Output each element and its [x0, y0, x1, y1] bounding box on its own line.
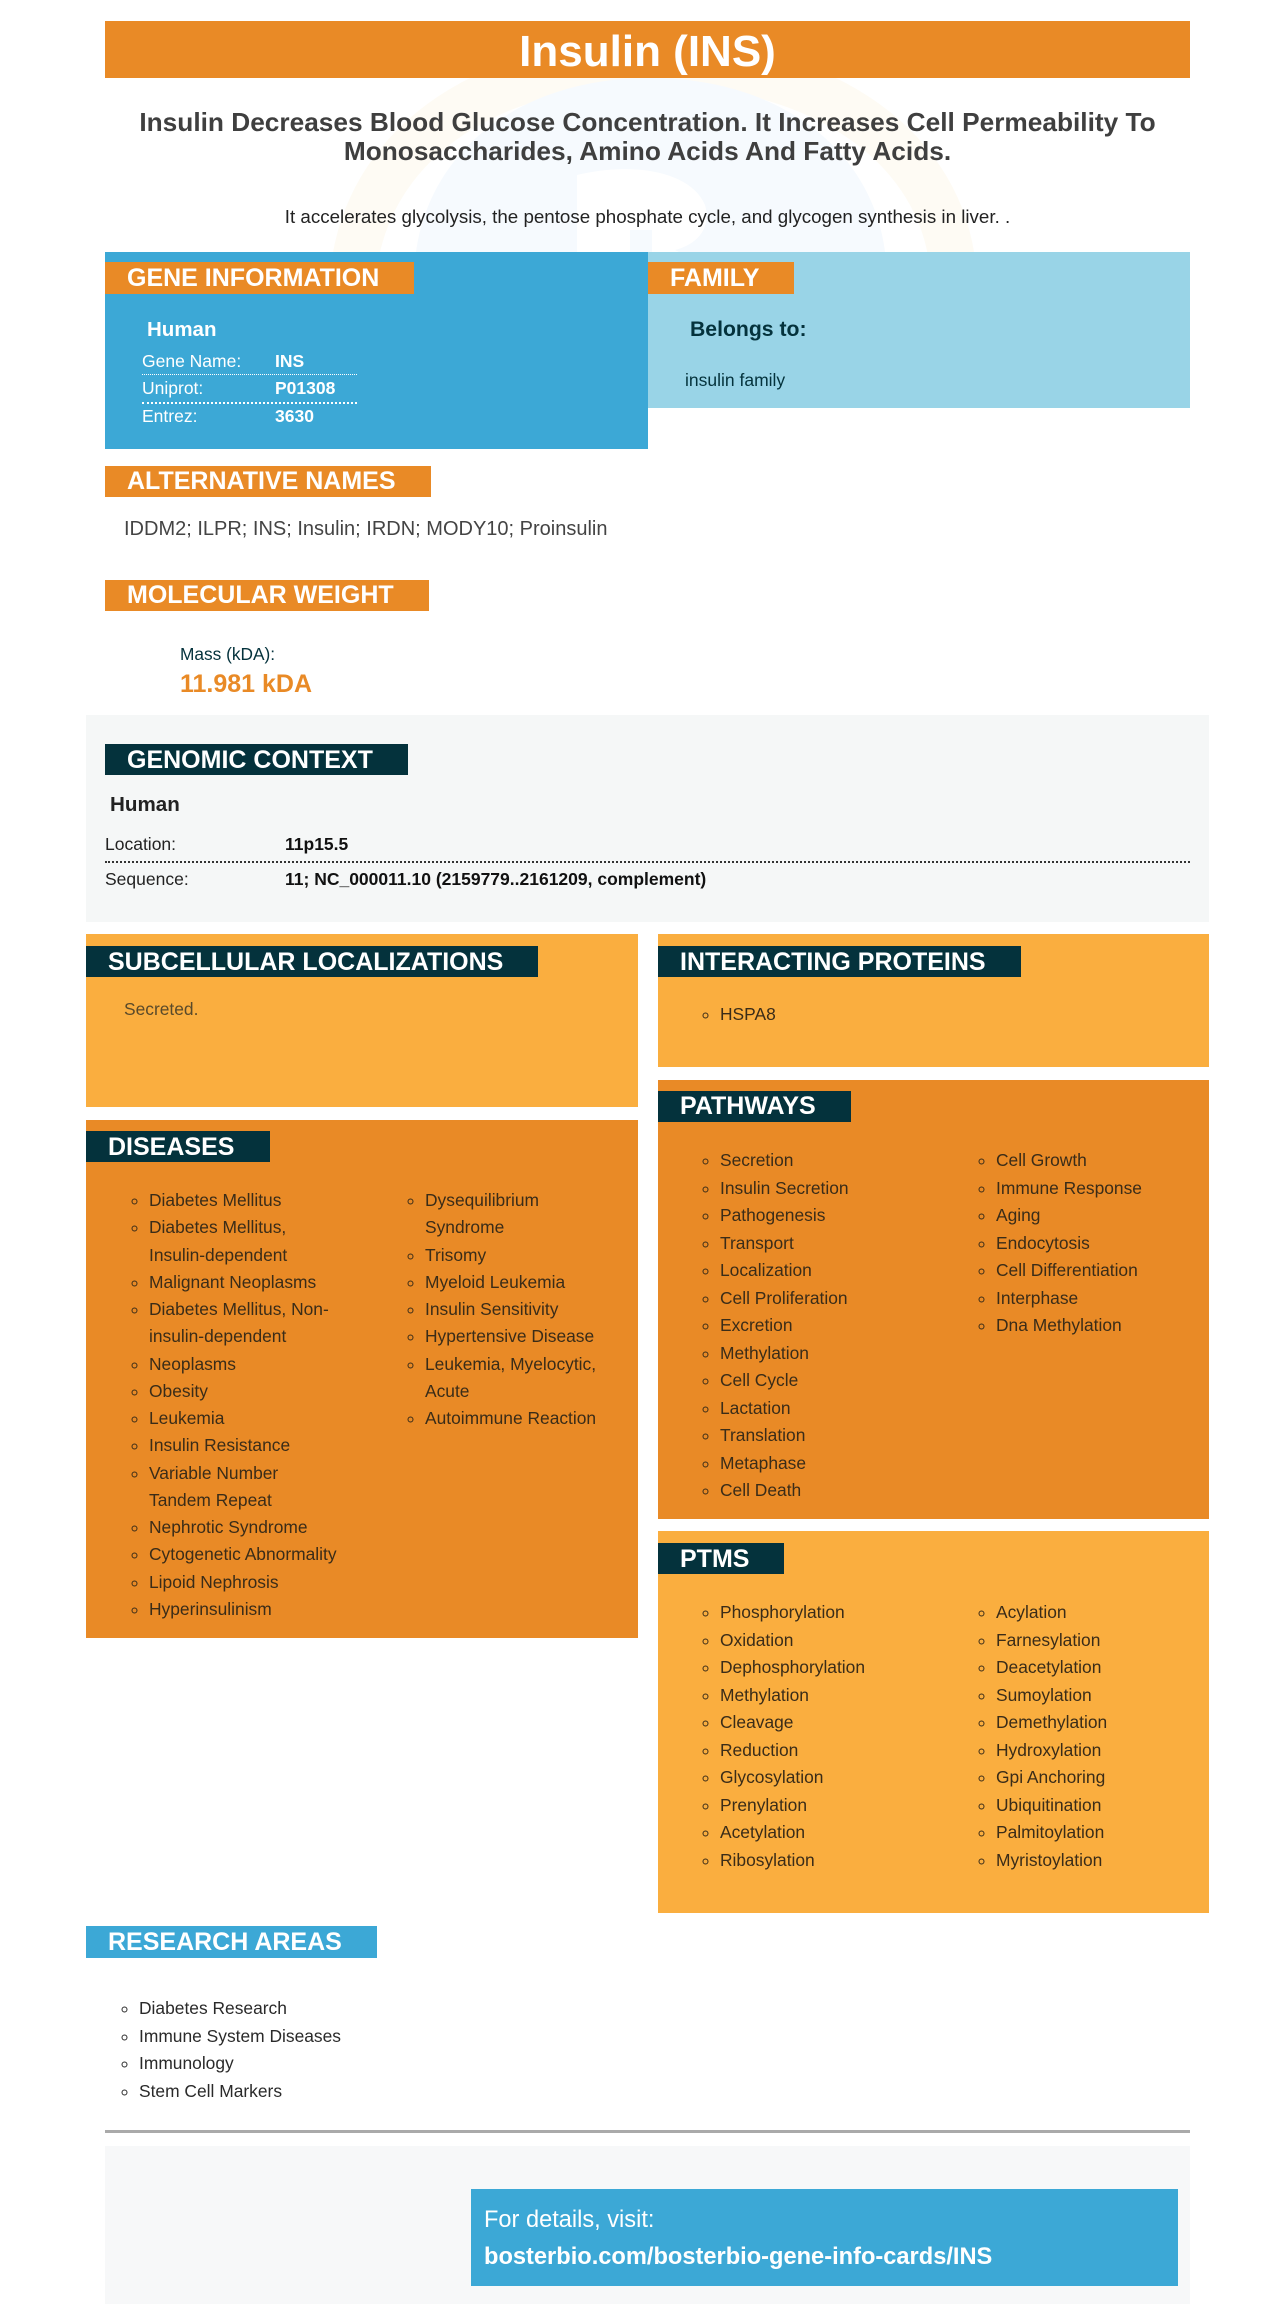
- pathways list column 2: Aging: [996, 1205, 1040, 1225]
- ptms list column 1: Reduction: [720, 1740, 798, 1760]
- ptms list column 1: Acetylation: [720, 1822, 805, 1842]
- pathways list column 1: Excretion: [720, 1315, 792, 1335]
- research areas list: [122, 1998, 341, 2100]
- pathways list column 1: Translation: [720, 1425, 805, 1445]
- heading: family: FAMILY: [670, 264, 759, 292]
- ptms list column 1: Dephosphorylation: [720, 1657, 865, 1677]
- diseases list column 1: insulin-dependent: [149, 1326, 286, 1346]
- pathways list column 1: [702, 1150, 849, 1500]
- pathways list column 1: Cell Cycle: [720, 1370, 798, 1390]
- title bar: Insulin (INS): [519, 27, 776, 76]
- pathways list column 1: Secretion: [720, 1150, 793, 1170]
- diseases list column 2: [408, 1190, 596, 1428]
- heading: interacting proteins: INTERACTING PROTEINS: [680, 948, 986, 976]
- heading: alternative names: ALTERNATIVE NAMES: [127, 467, 396, 495]
- diseases list column 2: Leukemia, Myelocytic,: [425, 1354, 596, 1374]
- ptms list column 2: Hydroxylation: [996, 1740, 1101, 1760]
- diseases list column 2: Autoimmune Reaction: [425, 1408, 596, 1428]
- sequence row: 11; NC_000011.10 (2159779..2161209, complement): [285, 869, 706, 889]
- pathways list column 2: Endocytosis: [996, 1232, 1090, 1252]
- diseases list column 2: Myeloid Leukemia: [425, 1272, 565, 1292]
- subtitle: [139, 107, 1156, 166]
- pathways list column 2: Cell Differentiation: [996, 1260, 1138, 1280]
- diseases list column 1: Neoplasms: [149, 1354, 236, 1374]
- mass value: 11.981 kDA: [180, 670, 312, 698]
- location row: [105, 830, 1190, 863]
- interacting proteins list: HSPA8: [720, 1004, 776, 1024]
- gene name row: Gene Name:: [142, 351, 241, 371]
- uniprot row: Uniprot:: [142, 378, 203, 398]
- family value: insulin family: [685, 370, 785, 390]
- ptms list column 1: [702, 1602, 865, 1870]
- research areas list: Immune System Diseases: [139, 2026, 341, 2046]
- heading: diseases: [86, 1131, 270, 1162]
- panel: pathways: [658, 1080, 1209, 1519]
- subtitle: Insulin Decreases Blood Glucose Concentration. It Increases Cell Permeability To: [139, 107, 1156, 137]
- species label: Human: [110, 793, 180, 816]
- diseases list column 1: Insulin-dependent: [149, 1244, 287, 1264]
- entrez row: 3630: [275, 406, 314, 426]
- uniprot row: P01308: [275, 378, 335, 398]
- pathways list column 1: Pathogenesis: [720, 1205, 825, 1225]
- diseases list column 2: Dysequilibrium: [425, 1190, 539, 1210]
- ptms list column 1: Phosphorylation: [720, 1602, 845, 1622]
- heading: research areas: RESEARCH AREAS: [108, 1928, 342, 1956]
- ptms list column 2: Gpi Anchoring: [996, 1767, 1105, 1787]
- panel: ptms: [658, 1531, 1209, 1913]
- ptms list column 1: Ribosylation: [720, 1850, 815, 1870]
- diseases list column 1: Diabetes Mellitus: [149, 1190, 281, 1210]
- ptms list column 2: Palmitoylation: [996, 1822, 1104, 1842]
- panel: gene information: [105, 252, 648, 449]
- diseases list column 1: Lipoid Nephrosis: [149, 1572, 279, 1592]
- pathways list column 1: Cell Death: [720, 1480, 801, 1500]
- pathways list column 2: Interphase: [996, 1288, 1078, 1308]
- location row: Location:: [105, 834, 176, 854]
- heading: pathways: [658, 1091, 851, 1122]
- pathways list column 2: [978, 1150, 1142, 1335]
- ptms list column 1: Oxidation: [720, 1630, 793, 1650]
- ptms list column 2: Farnesylation: [996, 1630, 1100, 1650]
- pathways list column 1: Metaphase: [720, 1452, 806, 1472]
- diseases list column 1: Insulin Resistance: [149, 1435, 290, 1455]
- heading: ptms: PTMS: [680, 1545, 749, 1573]
- panel: genomic context: [86, 715, 1209, 922]
- ptms list column 2: [978, 1602, 1107, 1870]
- footer panel: [105, 2146, 1190, 2304]
- ptms list column 2: Myristoylation: [996, 1850, 1102, 1870]
- pathways list column 2: Immune Response: [996, 1178, 1142, 1198]
- panel: diseases: [86, 1120, 638, 1638]
- ptms list column 2: Acylation: [996, 1602, 1067, 1622]
- pathways list column 1: Methylation: [720, 1342, 809, 1362]
- research areas list: Stem Cell Markers: [139, 2080, 282, 2100]
- ptms list column 2: Sumoylation: [996, 1684, 1092, 1704]
- entrez row: Entrez:: [142, 406, 197, 426]
- diseases list column 1: Diabetes Mellitus, Non-: [149, 1299, 329, 1319]
- pathways list column 2: Dna Methylation: [996, 1315, 1122, 1335]
- research areas list: Immunology: [139, 2053, 234, 2073]
- ptms list column 2: Deacetylation: [996, 1657, 1101, 1677]
- description: It accelerates glycolysis, the pentose phosphate cycle, and glycogen synthesis in liver. .: [285, 206, 1010, 227]
- heading: genomic context: GENOMIC CONTEXT: [127, 746, 373, 774]
- panel: subcellular localizations: [86, 934, 638, 1107]
- gene name row: [142, 347, 357, 375]
- diseases list column 1: Obesity: [149, 1381, 208, 1401]
- diseases list column 2: Syndrome: [425, 1217, 504, 1237]
- diseases list column 2: Hypertensive Disease: [425, 1326, 594, 1346]
- panel: interacting proteins: [658, 934, 1209, 1067]
- subtitle: Monosaccharides, Amino Acids And Fatty Acids.: [344, 136, 951, 166]
- diseases list column 1: Cytogenetic Abnormality: [149, 1544, 337, 1564]
- ptms list column 1: Methylation: [720, 1684, 809, 1704]
- pathways list column 1: Lactation: [720, 1398, 791, 1418]
- diseases list column 1: Nephrotic Syndrome: [149, 1517, 308, 1537]
- ptms list column 1: Glycosylation: [720, 1767, 823, 1787]
- mass label: Mass (kDA):: [180, 644, 275, 664]
- research areas list: Diabetes Research: [139, 1998, 287, 2018]
- heading: pathways: PATHWAYS: [680, 1092, 816, 1120]
- ptms list column 2: Ubiquitination: [996, 1794, 1101, 1814]
- location row: 11p15.5: [285, 834, 348, 854]
- panel: family: [648, 252, 1190, 408]
- gene name row: INS: [275, 351, 304, 371]
- pathways list column 1: Transport: [720, 1232, 794, 1252]
- heading: diseases: DISEASES: [108, 1133, 234, 1161]
- sequence row: Sequence:: [105, 869, 189, 889]
- diseases list column 2: Acute: [425, 1381, 469, 1401]
- pathways list column 2: Cell Growth: [996, 1150, 1087, 1170]
- diseases list column 1: Variable Number: [149, 1462, 278, 1482]
- callout label: For details, visit:: [484, 2207, 654, 2233]
- diseases list column 1: Malignant Neoplasms: [149, 1272, 316, 1292]
- pathways list column 1: Insulin Secretion: [720, 1178, 849, 1198]
- callout url: bosterbio.com/bosterbio-gene-info-cards/INS: [484, 2244, 992, 2270]
- species label: Human: [147, 318, 216, 341]
- diseases list column 1: Leukemia: [149, 1408, 224, 1428]
- diseases list column 1: Diabetes Mellitus,: [149, 1217, 286, 1237]
- heading: ptms: [658, 1543, 784, 1574]
- heading: molecular weight: MOLECULAR WEIGHT: [127, 581, 394, 609]
- entrez row: [142, 406, 314, 426]
- alternative names text: IDDM2; ILPR; INS; Insulin; IRDN; MODY10; Proinsulin: [124, 518, 607, 540]
- diseases list column 1: Hyperinsulinism: [149, 1599, 272, 1619]
- diseases list column 1: [132, 1190, 337, 1619]
- diseases list column 1: Tandem Repeat: [149, 1490, 272, 1510]
- heading: gene information: GENE INFORMATION: [127, 264, 379, 292]
- heading: subcellular localizations: SUBCELLULAR LOCALIZATIONS: [108, 948, 503, 976]
- background watermark: [334, 78, 974, 252]
- ptms list column 2: Demethylation: [996, 1712, 1107, 1732]
- diseases list column 2: Insulin Sensitivity: [425, 1299, 558, 1319]
- ptms list column 1: Cleavage: [720, 1712, 793, 1732]
- callout: details link: [471, 2189, 1178, 2286]
- heading: family: [648, 262, 794, 294]
- uniprot row: [142, 375, 357, 404]
- localization text: Secreted.: [124, 999, 198, 1019]
- title bar: [105, 21, 1190, 78]
- pathways list column 1: Localization: [720, 1260, 812, 1280]
- pathways list column 1: Cell Proliferation: [720, 1288, 848, 1308]
- diseases list column 2: Trisomy: [425, 1244, 486, 1264]
- ptms list column 1: Prenylation: [720, 1794, 807, 1814]
- belongs to label: Belongs to:: [690, 318, 807, 341]
